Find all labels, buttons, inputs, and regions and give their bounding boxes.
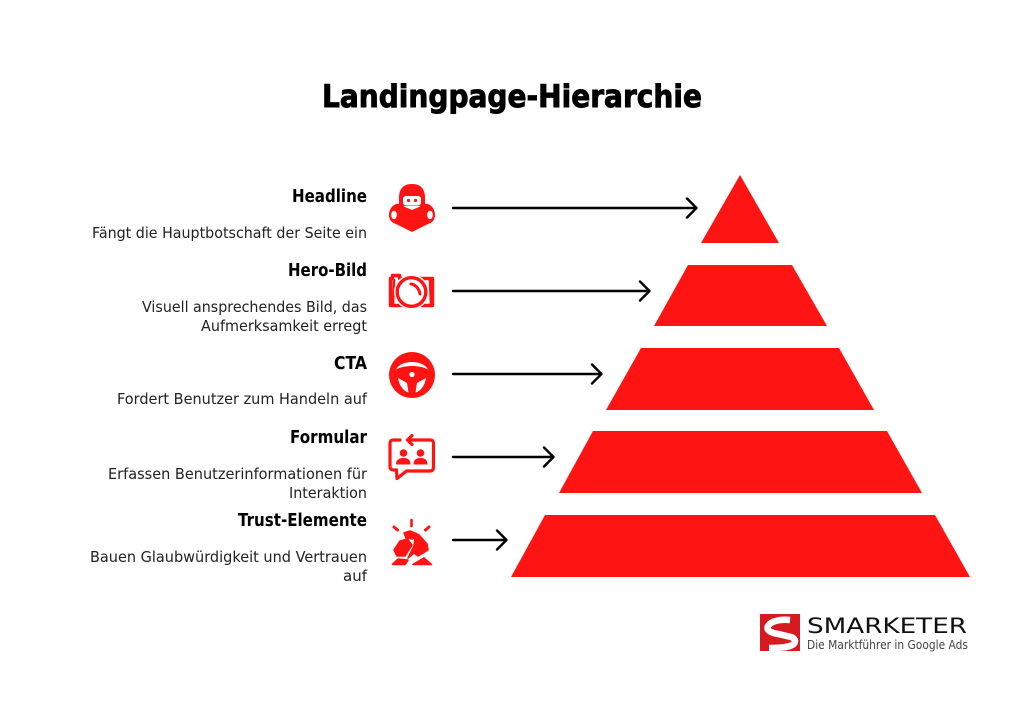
pyramid level 4 — [559, 431, 922, 493]
logo tagline: Die Marktführer in Google Ads — [807, 637, 968, 652]
text block: Headline: Fängt die Hauptbotschaft der Seite ein — [92, 224, 367, 242]
arrow 2 — [453, 282, 650, 300]
text block: Formular: Formular — [290, 428, 367, 448]
pyramid level 1 — [701, 175, 779, 243]
icon: steering wheel — [389, 352, 435, 398]
text block: Formular: Interaktion — [289, 484, 367, 502]
text block: Hero-Bild: Visuell ansprechendes Bild, das — [142, 298, 367, 316]
text block: Hero-Bild: Hero-Bild — [288, 261, 367, 281]
text block: Trust-Elemente: Bauen Glaubwürdigkeit und Vertrauen — [90, 548, 367, 566]
pyramid level 2 — [654, 265, 827, 326]
title: Landingpage-Hierarchie — [322, 79, 702, 115]
text block: Hero-Bild: Aufmerksamkeit erregt — [201, 317, 367, 335]
icon: camera — [390, 274, 432, 310]
text block: Hero-Bild — [142, 261, 367, 335]
arrow 1 — [453, 198, 696, 218]
icon: chat form — [390, 436, 434, 478]
arrow 3 — [453, 364, 602, 384]
icon: reader — [389, 184, 435, 232]
text block: Headline — [92, 187, 367, 242]
pyramid level 5 — [511, 515, 970, 577]
text block: Trust-Elemente: Trust-Elemente — [238, 511, 367, 531]
text block: Trust-Elemente: auf — [343, 567, 368, 585]
logo name: SMARKETER — [807, 614, 967, 638]
icon: handshake fist — [392, 520, 432, 564]
logo mark — [760, 614, 800, 651]
arrows — [453, 198, 696, 550]
pyramid — [511, 175, 970, 577]
arrow 4 — [453, 448, 554, 466]
text block: Trust-Elemente — [90, 511, 368, 585]
text block: CTA: Fordert Benutzer zum Handeln auf — [117, 390, 367, 408]
pyramid level 3 — [606, 348, 874, 410]
text block: CTA — [117, 354, 367, 408]
text block: CTA: CTA — [334, 354, 367, 374]
logo: Smarketer — [760, 614, 968, 652]
text block: Headline: Headline — [292, 187, 367, 207]
arrow 5 — [453, 530, 506, 550]
text block: Formular: Erfassen Benutzerinformationen für — [108, 465, 368, 483]
text block: Formular — [108, 428, 368, 502]
